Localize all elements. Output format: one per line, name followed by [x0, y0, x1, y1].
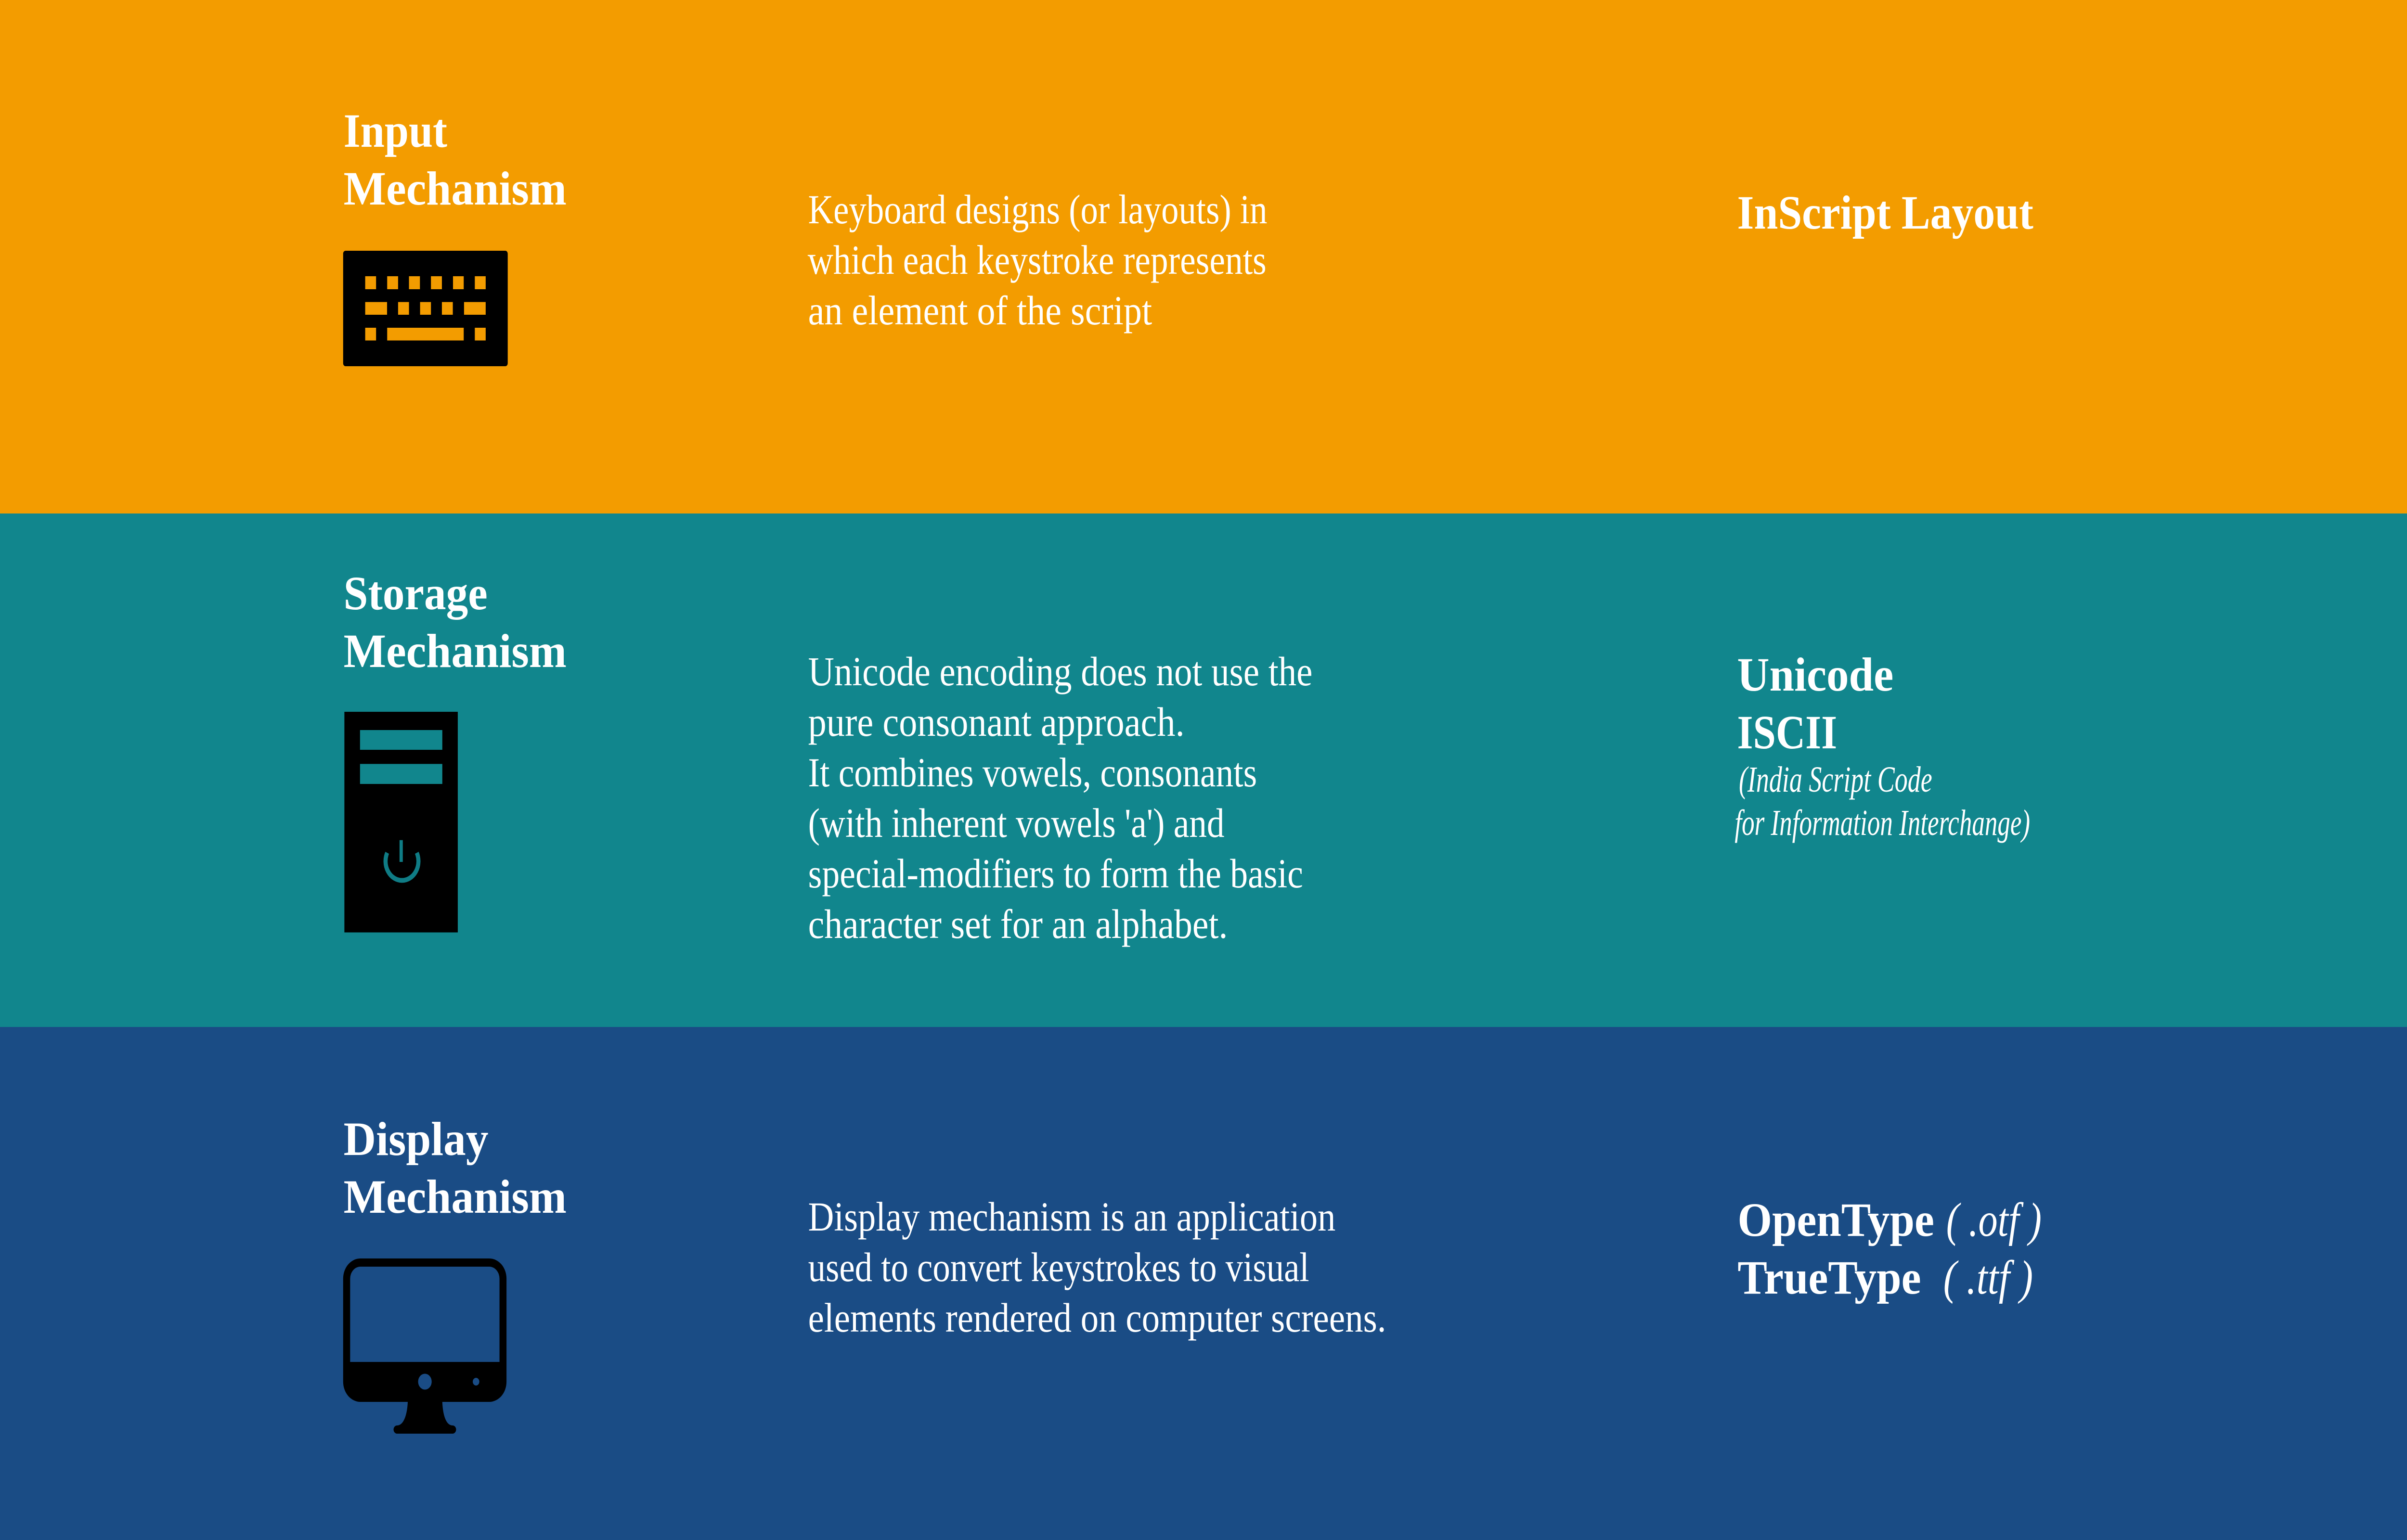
- icon: computer tower: [344, 712, 458, 933]
- label: OpenType and TrueType: [1737, 1194, 2042, 1305]
- heading: input mechanism: Input: [344, 104, 447, 158]
- description: input mechanism: which each keystroke represents: [808, 238, 1267, 283]
- description: display mechanism: used to convert keystrokes to visual: [808, 1245, 1309, 1290]
- description: input mechanism: an element of the script: [808, 288, 1152, 334]
- icon: desktop monitor: [343, 1258, 506, 1434]
- panel: input mechanism: [0, 0, 2407, 513]
- label: Unicode and ISCII: (India Script Code: [1739, 759, 1932, 800]
- label: InScript Layout: InScript Layout: [1737, 186, 2033, 240]
- label: Unicode and ISCII: for Information Interchange): [1734, 803, 2030, 843]
- description: storage mechanism: It combines vowels, consonants: [808, 750, 1257, 796]
- description: storage mechanism: special-modifiers to form the basic: [808, 851, 1303, 897]
- description: storage mechanism: pure consonant approach.: [808, 700, 1185, 745]
- heading: storage mechanism: [344, 567, 567, 678]
- description: storage mechanism: (with inherent vowels 'a') and: [808, 801, 1225, 846]
- icon: keyboard: [343, 251, 508, 366]
- heading: display mechanism: Mechanism: [344, 1170, 567, 1224]
- description: storage mechanism: Unicode encoding does not use the: [808, 649, 1312, 694]
- label: Unicode and ISCII: ISCII: [1737, 706, 1837, 759]
- description: display mechanism: elements rendered on computer screens.: [808, 1296, 1386, 1341]
- label: OpenType and TrueType: OpenType: [1737, 1194, 1934, 1247]
- heading: storage mechanism: Mechanism: [344, 625, 567, 678]
- panel: storage mechanism: [0, 513, 2407, 1027]
- label: OpenType and TrueType: ( .otf ): [1946, 1194, 2042, 1247]
- heading: input mechanism: [344, 104, 567, 216]
- description: storage mechanism: character set for an alphabet.: [808, 902, 1228, 947]
- label: Unicode and ISCII: Unicode: [1737, 648, 1893, 702]
- label: OpenType and TrueType: ( .ttf ): [1943, 1251, 2033, 1305]
- description: display mechanism: [808, 1194, 1386, 1341]
- description: input mechanism: Keyboard designs (or layouts) in: [808, 187, 1267, 232]
- description: input mechanism: [808, 187, 1267, 334]
- label: Unicode and ISCII: [1734, 648, 2030, 843]
- description: display mechanism: Display mechanism is an application: [808, 1194, 1335, 1240]
- heading: display mechanism: Display: [344, 1113, 489, 1166]
- heading: storage mechanism: Storage: [344, 567, 488, 620]
- heading: display mechanism: [344, 1113, 567, 1224]
- heading: input mechanism: Mechanism: [344, 162, 567, 216]
- label: OpenType and TrueType: TrueType: [1737, 1251, 1921, 1305]
- description: storage mechanism: [808, 649, 1312, 947]
- panel: display mechanism: [0, 1027, 2407, 1540]
